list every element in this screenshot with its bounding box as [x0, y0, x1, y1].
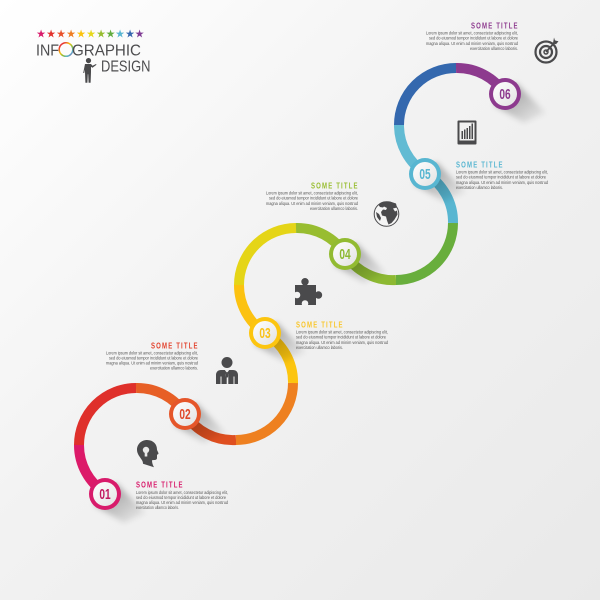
node 01: [89, 478, 121, 510]
rainbow stars: ★: [115, 28, 125, 40]
text block 05: SOME TITLE: [456, 159, 504, 170]
node 02: 02: [179, 406, 191, 423]
text block 04: Lorem ipsum dolor sit amet, consectetur adipiscing elit,: [266, 190, 358, 196]
logo word GRAPHIC: GRAPHIC: [72, 42, 141, 60]
text block 02: Lorem ipsum dolor sit amet, consectetur adipiscing elit,: [106, 350, 198, 356]
node 02: [169, 398, 201, 430]
node shadows: [94, 83, 546, 523]
node 03: 03: [259, 325, 271, 342]
logo word DESIGN: DESIGN: [101, 58, 150, 76]
text block 04: SOME TITLE: [311, 180, 359, 191]
node 06: 06: [499, 86, 511, 103]
segment 03 amber: [239, 285, 265, 333]
logo rainbow O: [59, 43, 73, 56]
text block 04: [266, 180, 359, 212]
text block 05: Lorem ipsum dolor sit amet, consectetur adipiscing elit,: [456, 170, 548, 176]
text block 06: magna aliqua. Ut enim ad minim veniam, quis nostrud: [426, 41, 518, 47]
text block 03: [296, 319, 388, 351]
icon: head with light bulb: [137, 440, 158, 467]
text block 03: exercitation ullamco laboris.: [296, 345, 343, 351]
rainbow stars: ★: [46, 28, 56, 40]
timeline ribbon: [79, 68, 505, 493]
text block 02: exercitation ullamco laboris.: [150, 366, 198, 372]
text block 03: Lorem ipsum dolor sit amet, consectetur adipiscing elit,: [296, 330, 388, 336]
node 05: [409, 158, 441, 190]
segment 04 lime: [296, 228, 345, 254]
icon: puzzle piece: [294, 278, 322, 307]
segment 02 orange-red: [136, 388, 185, 414]
rainbow stars: ★: [56, 28, 66, 40]
segment 02 orange: [236, 383, 293, 440]
node 03: [249, 317, 281, 349]
rainbow stars: ★: [86, 28, 96, 40]
text block 03: sed do eiusmod tempor incididunt ut labore et dolore: [296, 335, 386, 341]
text block 06: exercitation ullamco laboris.: [470, 46, 518, 52]
text block 02: SOME TITLE: [151, 340, 199, 351]
segment 05 light blue: [399, 125, 425, 173]
segment 04 green: [396, 223, 453, 280]
node 04: 04: [339, 246, 351, 263]
node 04: [329, 238, 361, 270]
text block 02: sed do eiusmod tempor incididunt ut labore et dolore: [109, 356, 198, 362]
rainbow stars: ★: [135, 28, 145, 40]
logo word INF: INF: [36, 42, 59, 60]
text block 06: sed do eiusmod tempor incididunt ut labore et dolore: [429, 36, 518, 42]
rainbow stars: ★: [125, 28, 135, 40]
node 05: 05: [419, 166, 431, 183]
segment 01 crimson: [79, 445, 106, 493]
icon: presenter: [83, 58, 96, 83]
icon: tablet with chart: [458, 120, 476, 144]
logo: infographic design: [36, 28, 150, 83]
node 06: [489, 78, 521, 110]
rainbow stars: ★: [106, 28, 116, 40]
text block 01: Lorem ipsum dolor sit amet, consectetur adipiscing elit,: [136, 490, 228, 496]
icon: target with arrow: [536, 38, 558, 62]
text block 06: [426, 20, 519, 52]
text block 05: [456, 159, 548, 191]
text block 06: SOME TITLE: [471, 20, 519, 31]
segment 03 yellow: [265, 333, 293, 383]
text block 05: sed do eiusmod tempor incididunt ut labore et dolore: [456, 175, 546, 181]
text block 03: SOME TITLE: [296, 319, 344, 330]
rainbow stars: ★: [96, 28, 106, 40]
text block 01: magna aliqua. Ut enim ad minim veniam, quis nostrud: [136, 500, 228, 506]
segment 03 lemon: [239, 228, 296, 285]
text block 04: exercitation ullamco laboris.: [310, 206, 358, 212]
text block 02: [106, 340, 199, 372]
segment 02 deep orange: [185, 414, 236, 440]
text block 01: SOME TITLE: [136, 479, 184, 490]
segment 05 blue: [399, 68, 456, 125]
rainbow stars: ★: [36, 28, 46, 40]
text block 04: sed do eiusmod tempor incididunt ut labore et dolore: [269, 196, 358, 202]
text block 02: magna aliqua. Ut enim ad minim veniam, quis nostrud: [106, 360, 198, 366]
rainbow stars: ★: [66, 28, 76, 40]
node 01: 01: [99, 486, 111, 503]
rainbow stars: [36, 28, 145, 40]
text block 01: sed do eiusmod tempor incididunt ut labore et dolore: [136, 495, 226, 501]
segment 04 olive: [345, 254, 396, 280]
segment 05 sky: [425, 173, 453, 223]
text block 01: [136, 479, 228, 511]
segment 01 red: [79, 388, 136, 445]
text block 05: magna aliqua. Ut enim ad minim veniam, quis nostrud: [456, 180, 548, 186]
text block 06: Lorem ipsum dolor sit amet, consectetur adipiscing elit,: [426, 30, 518, 36]
text block 05: exercitation ullamco laboris.: [456, 185, 503, 191]
rainbow stars: ★: [76, 28, 86, 40]
icon: globe: [374, 201, 399, 226]
text block 01: exercitation ullamco laboris.: [136, 505, 179, 511]
text block 04: magna aliqua. Ut enim ad minim veniam, quis nostrud: [266, 201, 358, 207]
icon: businessman: [216, 357, 238, 384]
text block 03: magna aliqua. Ut enim ad minim veniam, quis nostrud: [296, 340, 388, 346]
segment 06 purple: [456, 68, 505, 94]
